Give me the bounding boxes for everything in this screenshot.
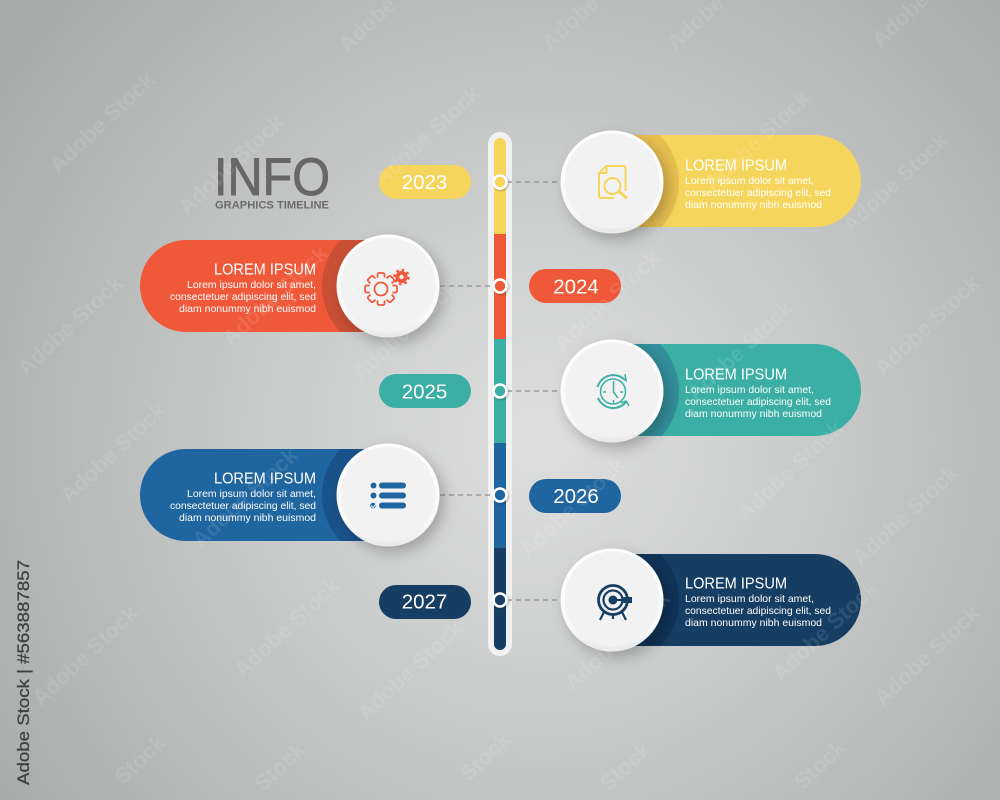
watermarks: Adobe Stock	[369, 80, 485, 191]
panel: 2023 yellow card	[560, 130, 861, 246]
icon disc: gears	[336, 234, 440, 338]
panel: 2027 navy card	[560, 548, 861, 664]
title: INFO	[214, 148, 330, 207]
panel: 2026 blue card: diam nonummy nibh euismod	[179, 512, 316, 524]
watermarks: Adobe Stock	[514, 452, 630, 563]
watermarks: Adobe Stock	[682, 295, 798, 406]
panel: 2023 yellow card: consectetuer adipiscing elit, sed	[685, 187, 831, 199]
watermarks: Stock	[594, 736, 656, 796]
watermarks: Adobe Stock	[559, 585, 675, 696]
watermarks: Stock	[249, 736, 311, 796]
watermarks: Adobe Stock	[229, 572, 345, 683]
icon disc: document search	[560, 130, 664, 234]
panel: 2025 teal card: consectetuer adipiscing elit, sed	[685, 396, 831, 408]
year pill 2023: 2023	[402, 171, 447, 194]
panel: 2026 blue card	[140, 444, 450, 558]
watermarks: Adobe Stock	[347, 275, 463, 386]
watermarks: Stock	[454, 726, 516, 786]
watermarks: Adobe Stock	[869, 600, 985, 711]
year pill 2025	[379, 374, 471, 408]
panel: 2024 red card: diam nonummy nibh euismod	[179, 303, 316, 315]
year pill 2025: 2025	[402, 380, 447, 404]
panel: 2024 red card: Lorem ipsum dolor sit amet,	[187, 279, 316, 291]
icon disc: target	[560, 548, 664, 652]
timeline bar	[488, 132, 512, 656]
panel: 2023 yellow card: LOREM IPSUM	[685, 158, 787, 174]
year pill 2024: 2024	[553, 276, 599, 298]
year pill 2026: 2026	[553, 485, 599, 508]
panel: 2024 red card: consectetuer adipiscing elit, sed	[170, 291, 316, 303]
year pill 2023	[379, 165, 471, 199]
watermarks: Adobe Stock	[352, 615, 468, 726]
panel: 2026 blue card: consectetuer adipiscing elit, sed	[170, 500, 316, 512]
watermarks: Adobe Stock	[173, 109, 289, 220]
panel: 2025 teal card: LOREM IPSUM	[685, 366, 787, 384]
watermarks: Adobe Stock	[549, 245, 665, 356]
panel: 2027 navy card: consectetuer adipiscing elit, sed	[685, 605, 831, 617]
connector lines	[440, 182, 562, 600]
watermarks: Adobe Stock	[12, 270, 128, 381]
watermarks: Adobe Stock	[187, 442, 303, 553]
panel: 2024 red card	[140, 234, 450, 350]
title: GRAPHICS TIMELINE	[215, 200, 329, 212]
watermarks: Adobe Stock	[837, 127, 953, 238]
watermarks: Adobe Stock	[217, 240, 333, 351]
panel: 2025 teal card: Lorem ipsum dolor sit amet,	[685, 384, 814, 396]
watermarks: Adobe Stock	[732, 415, 848, 526]
year pill 2027	[379, 585, 471, 619]
stock id label: Adobe Stock | #563887857	[14, 560, 33, 785]
watermarks: Stock	[109, 729, 171, 789]
panel: 2027 navy card: diam nonummy nibh euismod	[685, 617, 822, 629]
icon disc: checklist	[336, 444, 440, 546]
year pill 2024	[529, 269, 621, 303]
panel: 2027 navy card: Lorem ipsum dolor sit amet,	[685, 593, 814, 605]
watermarks: Adobe Stock	[27, 600, 143, 711]
watermarks: Adobe Stock	[767, 575, 883, 686]
watermarks: Adobe Stock	[55, 397, 171, 508]
panel: 2023 yellow card: diam nonummy nibh euismod	[685, 199, 822, 211]
watermarks: Adobe Stock	[44, 67, 160, 178]
year pill 2027: 2027	[402, 590, 447, 614]
icon disc: clock	[560, 340, 664, 442]
panel: 2025 teal card	[559, 340, 861, 455]
watermarks: Stock	[789, 734, 851, 794]
panel: 2026 blue card: Lorem ipsum dolor sit amet,	[187, 488, 316, 500]
watermarks: Adobe Stock	[699, 85, 815, 196]
timeline nodes	[494, 176, 506, 606]
panel: 2026 blue card: LOREM IPSUM	[214, 470, 316, 488]
panel: 2023 yellow card: Lorem ipsum dolor sit amet,	[685, 175, 814, 187]
panel: 2027 navy card: LOREM IPSUM	[685, 576, 787, 592]
year pill 2026	[529, 479, 621, 513]
watermarks: Adobe Stock	[869, 270, 985, 381]
panel: 2025 teal card: diam nonummy nibh euismod	[685, 408, 822, 420]
watermarks: Adobe Stock	[847, 460, 963, 571]
panel: 2024 red card: LOREM IPSUM	[214, 262, 316, 278]
